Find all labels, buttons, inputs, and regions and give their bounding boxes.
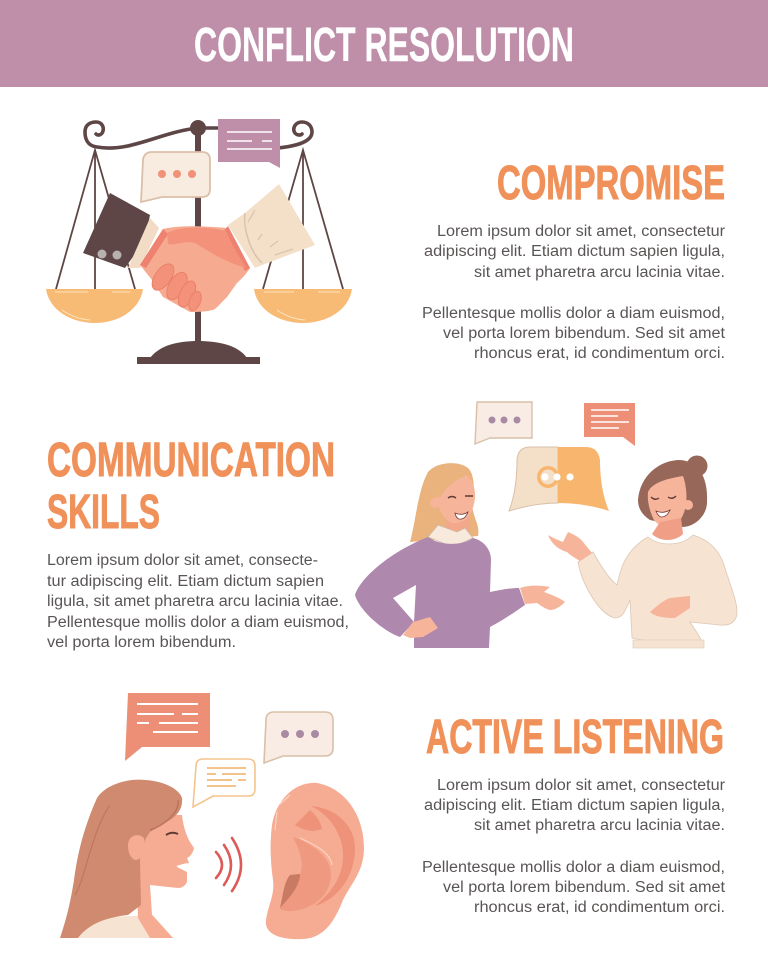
text block: communication body: Pellentesque mollis dolor a diam euismod,	[47, 614, 349, 631]
text block: active listening body: vel porta lorem bibendum. Sed sit amet	[443, 879, 726, 896]
text block: compromise body: adipiscing elit. Etiam dictum sapien ligula,	[424, 243, 725, 260]
panel: active listening illustration	[60, 693, 364, 939]
figure: woman in purple sweater	[355, 463, 565, 648]
heading: communication skills	[47, 434, 335, 539]
heading: communication skills: SKILLS	[47, 486, 160, 539]
text block: communication body: Lorem ipsum dolor sit amet, consecte-	[47, 552, 318, 569]
header banner	[0, 0, 768, 87]
figure: woman in profile speaking	[60, 780, 194, 938]
panel: compromise illustration	[46, 119, 352, 364]
text block: compromise body: sit amet pharetra arcu lacinia vitae.	[474, 264, 725, 281]
panel: compromise text	[422, 157, 726, 362]
icon: cream bubble with dots	[264, 712, 333, 763]
icon: coral bubble with lines	[584, 403, 635, 446]
icon: balance scale	[46, 120, 352, 364]
text block: communication body: ligula, sit amet pharetra arcu lacinia vitae.	[47, 593, 343, 610]
icon: ear	[266, 783, 364, 939]
icon: cream bubble with dots	[475, 402, 532, 444]
icon: puzzle speech bubble	[509, 447, 609, 511]
text block: active listening body: Pellentesque mollis dolor a diam euismod,	[422, 859, 725, 876]
text block: communication body	[47, 552, 349, 651]
panel: communication skills text	[47, 434, 349, 651]
text block: compromise body: vel porta lorem bibendum. Sed sit amet	[443, 325, 726, 342]
text block: active listening body: Lorem ipsum dolor sit amet, consectetur	[437, 777, 725, 794]
text block: active listening body: sit amet pharetra arcu lacinia vitae.	[474, 817, 725, 834]
figure: woman in cream sweater	[548, 456, 737, 648]
icon: handshake	[83, 184, 315, 312]
icon: orange outline bubble	[193, 759, 255, 807]
text block: compromise body: rhoncus erat, id condimentum orci.	[474, 345, 725, 362]
text block: compromise body: Pellentesque mollis dolor a diam euismod,	[422, 305, 725, 322]
icon: sound waves	[216, 838, 241, 891]
text block: communication body: vel porta lorem bibendum.	[47, 634, 236, 651]
text block: compromise body	[422, 223, 726, 362]
text block: active listening body: rhoncus erat, id condimentum orci.	[474, 899, 725, 916]
text block: communication body: tur adipiscing elit. Etiam dictum sapien	[47, 573, 324, 590]
panel: communication illustration	[355, 402, 737, 648]
icon: purple speech bubble	[218, 119, 280, 168]
icon: coral bubble with lines	[125, 693, 210, 761]
text block: compromise body: Lorem ipsum dolor sit amet, consectetur	[437, 223, 725, 240]
text block: active listening body: adipiscing elit. Etiam dictum sapien ligula,	[424, 797, 725, 814]
heading: communication skills: COMMUNICATION	[47, 434, 335, 487]
text block: active listening body	[422, 777, 726, 916]
title: CONFLICT RESOLUTION	[194, 19, 574, 72]
icon: cream speech bubble	[141, 152, 210, 202]
panel: active listening text	[422, 711, 726, 916]
